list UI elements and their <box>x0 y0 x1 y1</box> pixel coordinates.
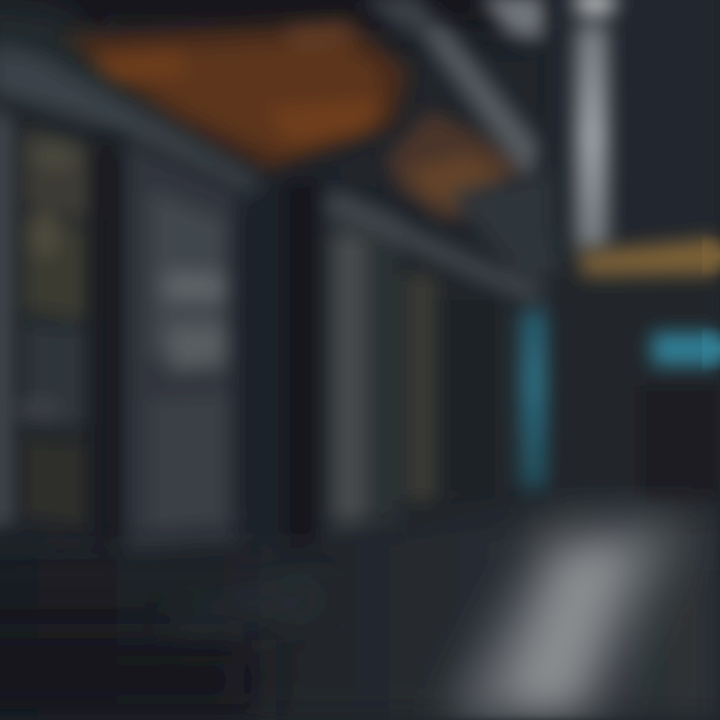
central grey rack <box>125 140 240 560</box>
upper wall band <box>330 170 560 310</box>
amber light strip <box>578 238 720 276</box>
diagonal pale beam <box>360 0 545 185</box>
floor highlight <box>170 550 625 700</box>
ceiling: orange wood beams <box>60 22 530 222</box>
bottom-left floor shadow <box>0 640 260 720</box>
white light column <box>573 0 617 250</box>
cyan sign right edge fill <box>702 326 720 372</box>
floor reflection <box>450 525 680 720</box>
left wall: grey upper band <box>0 45 260 200</box>
background wall <box>0 0 720 570</box>
blue vertical panel <box>520 310 550 490</box>
dark pillar left <box>97 140 123 545</box>
floor <box>0 510 720 720</box>
ceiling: brighter orange streaks <box>90 25 505 208</box>
left rack panel <box>0 100 115 545</box>
right rack panels <box>325 190 520 545</box>
dark pillar centre <box>240 175 325 550</box>
ceiling: dark top <box>0 0 560 170</box>
right dark room <box>555 0 720 510</box>
amber strip right edge fill <box>702 234 720 278</box>
cyan glowing sign <box>652 333 720 365</box>
